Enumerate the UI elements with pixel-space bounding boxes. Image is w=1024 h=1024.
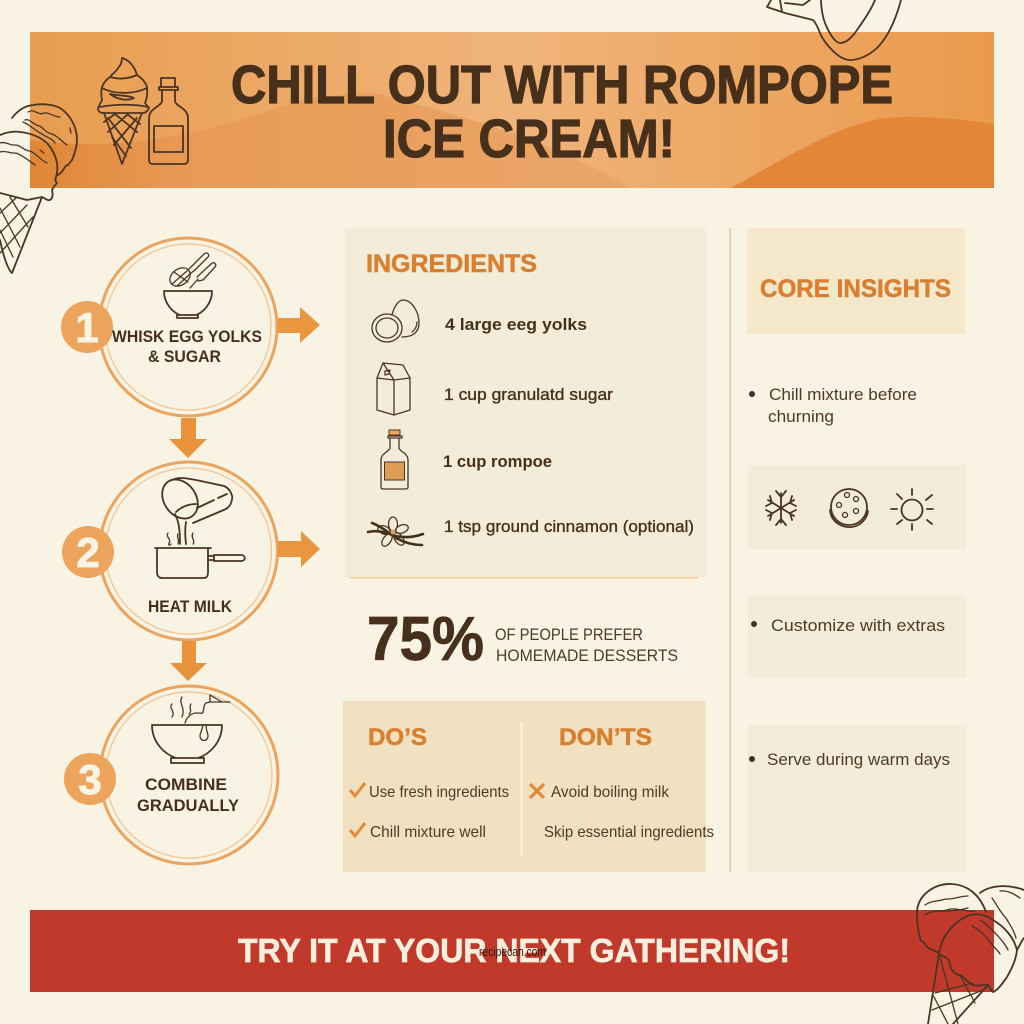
- arrow: step 1 to step 2: [169, 418, 207, 458]
- panel: insight serve: [748, 725, 966, 872]
- insight: chill mixture: Chill mixture before: [769, 385, 917, 404]
- statistic: 75 percent: HOMEMADE DESSERTS: [496, 646, 678, 665]
- icon: rompope bottle: [381, 430, 408, 489]
- step 1 number badge: [61, 301, 113, 353]
- decoration: bottom right ice cream: [917, 884, 1024, 1024]
- statistic: 75 percent: 75%: [367, 605, 484, 674]
- step 3 label: COMBINE: [145, 775, 227, 794]
- step 2: [62, 462, 278, 640]
- don't item: skip ingredients: Skip essential ingredients: [544, 824, 714, 841]
- statistic: 75 percent: OF PEOPLE PREFER: [495, 625, 643, 644]
- footer banner: [30, 910, 994, 992]
- ingredient: egg yolks: 4 large eeg yolks: [445, 315, 587, 334]
- panel: do's and don'ts: [343, 701, 714, 872]
- panel: insight customize: [748, 596, 966, 678]
- icon: cookie: [830, 489, 868, 527]
- do item: chill mixture: Chill mixture well: [370, 824, 486, 841]
- statistic: 75 percent: [367, 605, 678, 674]
- step 1 label: WHISK EGG YOLKS: [112, 327, 262, 346]
- step 1 number badge: 1: [75, 304, 99, 351]
- icon: ice cream cone and bottle: [98, 58, 188, 164]
- call to action: TRY IT AT YOUR NEXT GATHERING!: [238, 932, 790, 969]
- don't item: boiling milk: Avoid boiling milk: [551, 784, 670, 801]
- ingredient: cinnamon: 1 tsp ground cinnamon (optional): [444, 517, 694, 536]
- decoration: left ice cream: [0, 104, 77, 273]
- step 1 label: [112, 327, 262, 366]
- step 2 number badge: [62, 526, 114, 578]
- panel: ingredients: [345, 228, 706, 578]
- step 3 label: GRADUALLY: [137, 796, 240, 815]
- step 1 label: & SUGAR: [148, 347, 221, 366]
- do item: fresh ingredients: Use fresh ingredients: [369, 784, 509, 801]
- ingredient: rompope: 1 cup rompoe: [443, 452, 552, 471]
- panel: core insights heading: [747, 228, 965, 334]
- column divider: [730, 228, 731, 872]
- arrow: step 2 to step 3: [170, 641, 207, 681]
- icon: mixture poured into bowl: [152, 695, 230, 763]
- step 2 number badge: 2: [76, 529, 100, 576]
- icon: sun: [891, 489, 933, 530]
- arrow: step 1 to ingredients: [278, 307, 320, 343]
- step 1 circle: [99, 238, 277, 416]
- step 3 number badge: 3: [78, 756, 102, 803]
- icon: eggs: [372, 300, 419, 342]
- panel: insight serve: Serve during warm days: [767, 750, 950, 769]
- title: [231, 55, 893, 169]
- icon: whisk and bowl: [164, 253, 216, 318]
- header banner: [30, 32, 994, 188]
- icon: vanilla flower: [368, 517, 423, 548]
- icon: carton: [377, 363, 410, 415]
- step 3 circle: [100, 686, 278, 864]
- icon: milk poured into saucepan: [155, 473, 245, 578]
- arrow: step 2 to ingredients: [278, 531, 320, 567]
- do's heading: DO’S: [368, 724, 427, 751]
- title: ICE CREAM!: [383, 109, 675, 169]
- panel: insight customize: Customize with extras: [771, 616, 945, 635]
- insight: chill mixture: churning: [768, 407, 834, 426]
- ingredients heading: INGREDIENTS: [366, 250, 537, 278]
- step 3 label: [137, 775, 240, 815]
- ingredient: sugar: 1 cup granulatd sugar: [444, 385, 613, 404]
- icon: snowflake: [766, 491, 796, 525]
- decoration: top right bottle: [767, 0, 901, 60]
- step 2 circle: [100, 462, 278, 640]
- step 1: [61, 238, 277, 416]
- step 2 label: HEAT MILK: [148, 597, 233, 616]
- insight: chill mixture: [749, 385, 917, 426]
- panel: core insights heading: CORE INSIGHTS: [760, 275, 951, 303]
- panel: insight icons: [748, 465, 966, 549]
- step 3 number badge: [64, 753, 116, 805]
- title: CHILL OUT WITH ROMPOPE: [231, 55, 893, 115]
- don'ts heading: DON’TS: [559, 724, 652, 751]
- watermark: recipecan.com: [479, 945, 546, 959]
- step 3: [64, 686, 278, 864]
